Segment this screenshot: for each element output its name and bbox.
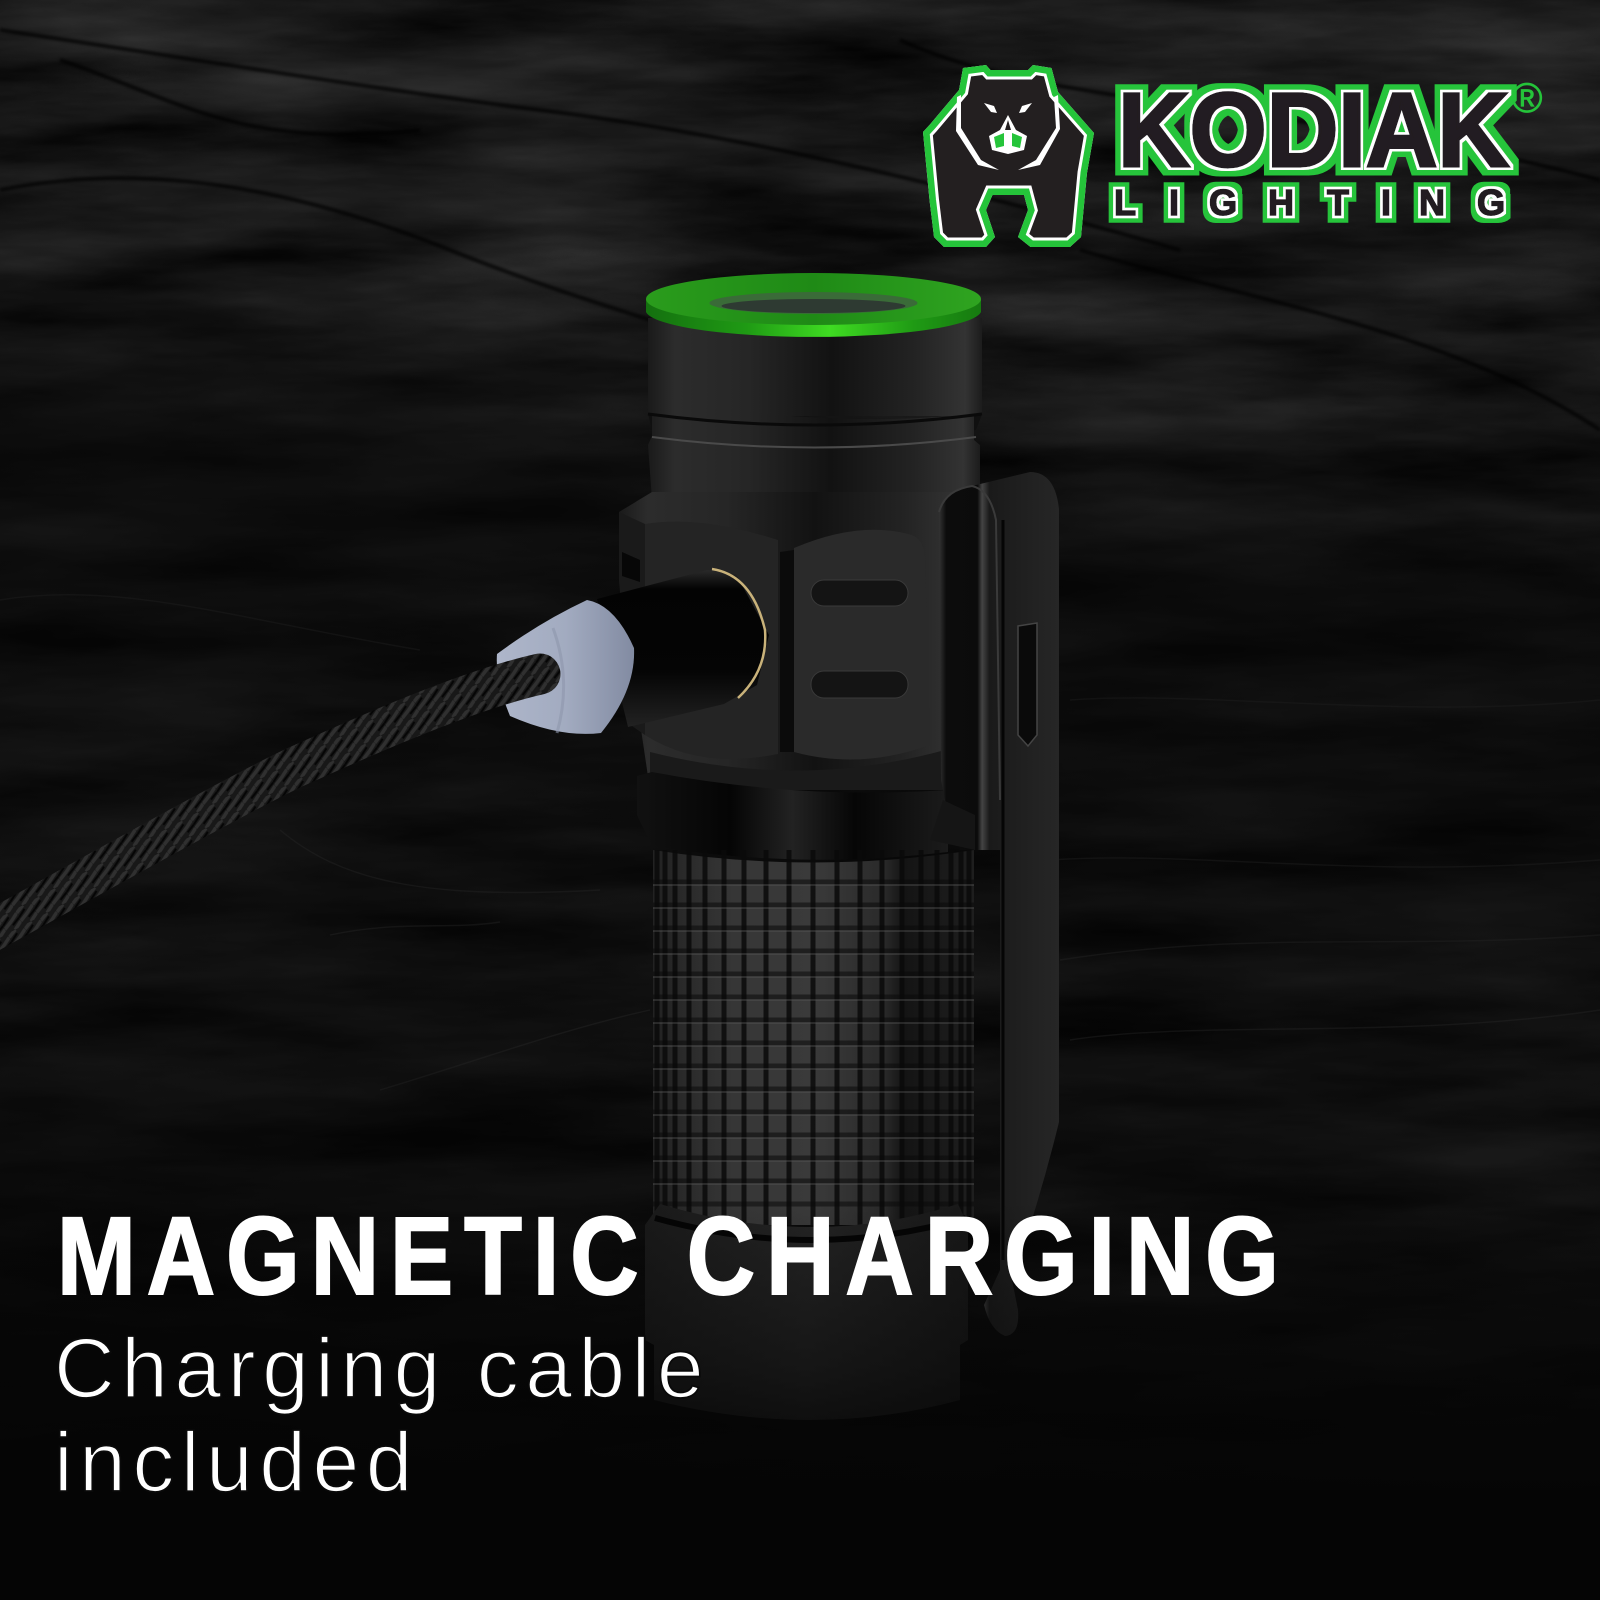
green bezel ring [646,273,981,337]
logo sub-wordmark: LIGHTING [1114,182,1505,223]
braided cord [0,674,540,932]
charging cable [0,569,769,932]
logo bear mark [923,65,1094,247]
knurled grip [653,850,974,1225]
bottom fade over tail [0,1200,1600,1500]
flashlight head body [619,318,982,790]
flashlight [619,273,1059,1420]
subtitle line 2: included [54,1415,419,1509]
lower collar ring [637,750,948,860]
subtitle line 1: Charging cable [54,1321,710,1415]
charging port slots [811,580,908,698]
bottom dark band [0,1500,1600,1600]
tail cap [645,1204,968,1420]
hex collar facets [619,512,930,760]
registered mark: ® [1512,74,1543,121]
title: MAGNETIC CHARGING [57,1194,1290,1318]
magnetic plug [597,569,769,727]
subtitle text [54,1321,710,1509]
logo: Kodiak Lighting [915,60,1543,255]
pocket clip [930,472,1059,1336]
clip slot [1018,623,1037,746]
translucent strain relief [497,600,634,734]
logo wordmark: KODIAK [1118,72,1509,189]
